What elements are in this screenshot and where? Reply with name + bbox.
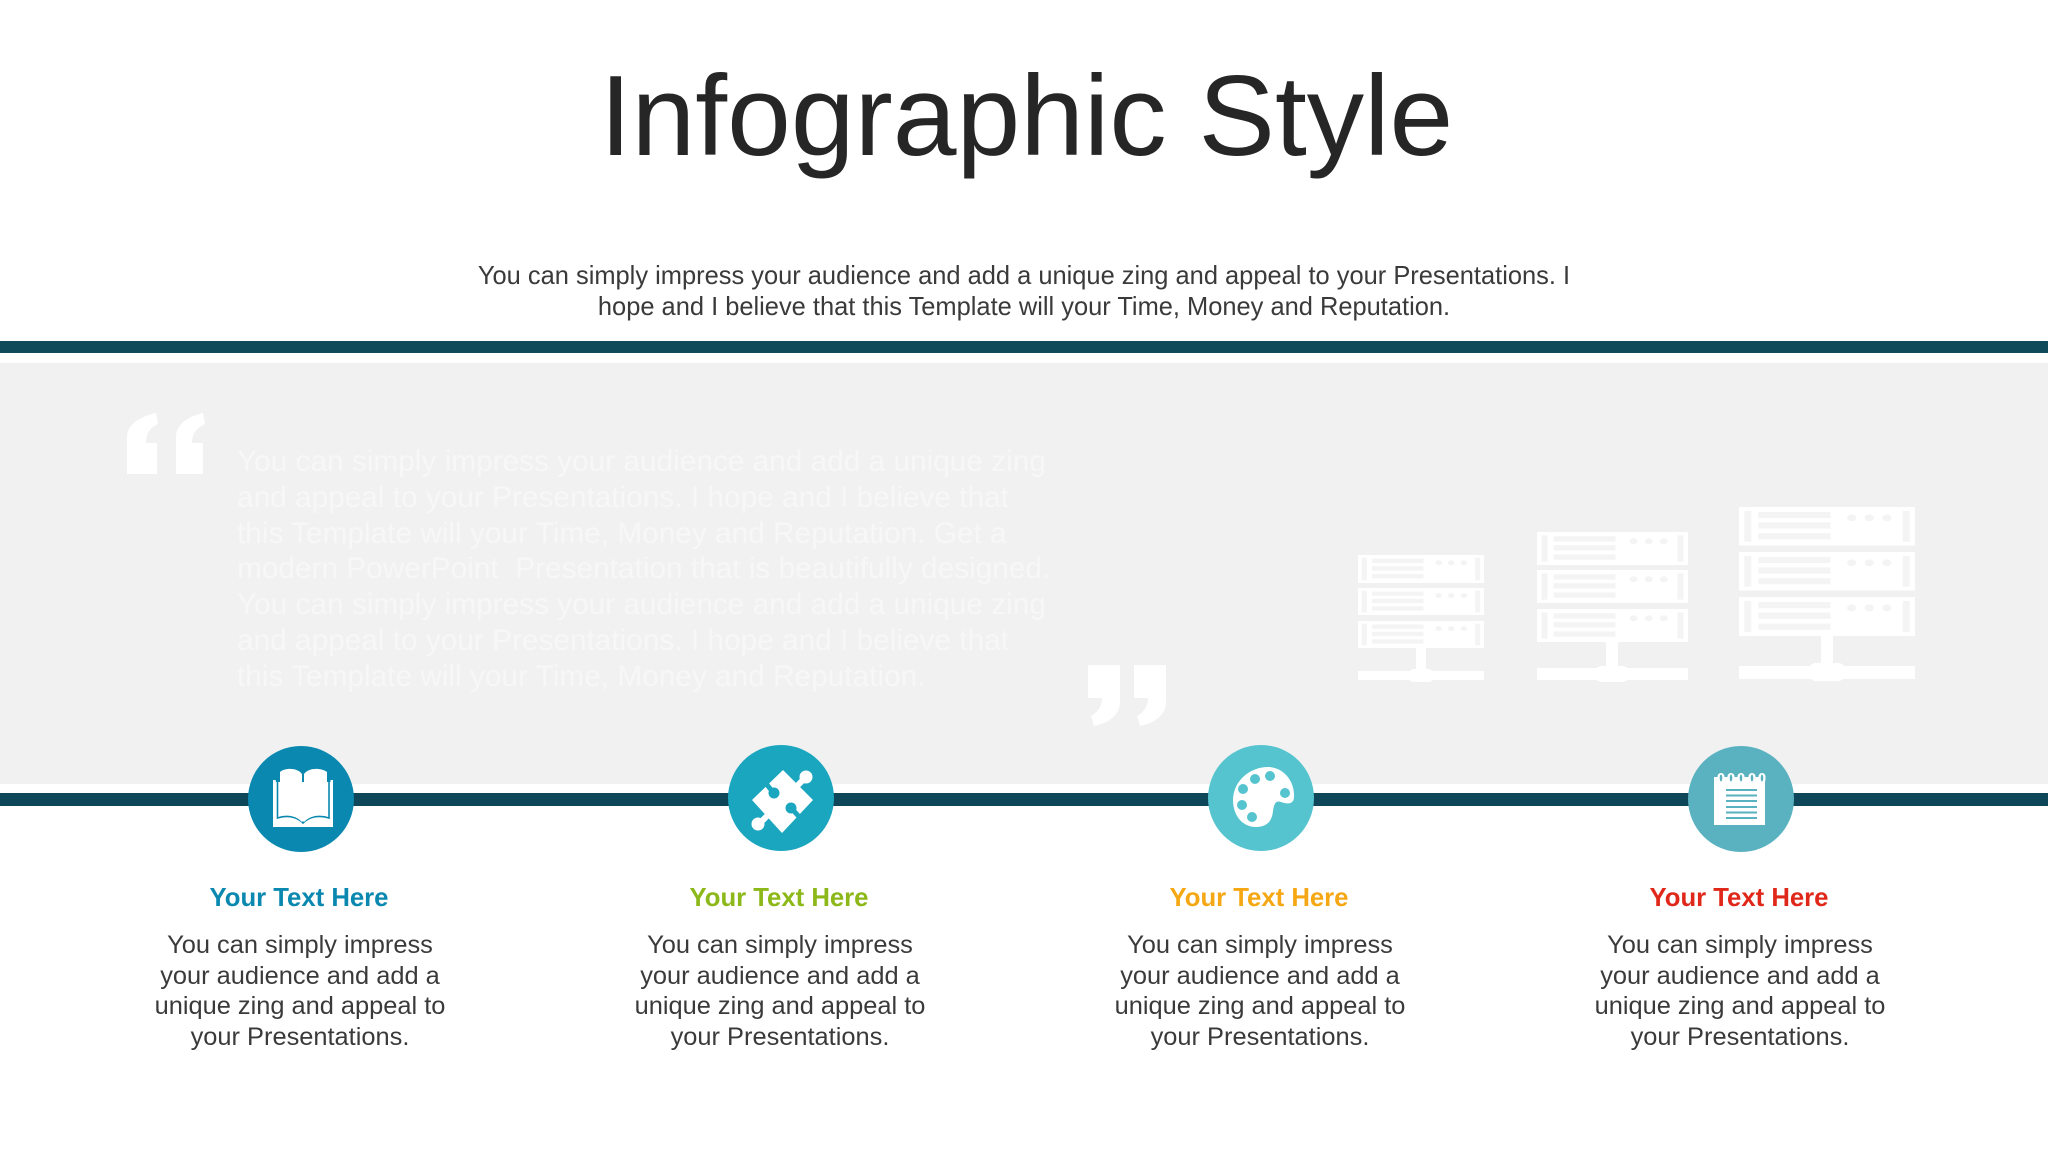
text: column 4: unique zing and appeal to <box>1595 992 1885 1020</box>
subtitle text: hope and I believe that this Template will your Time, Money and Reputation. <box>598 293 1450 321</box>
quote paragraph: and appeal to your Presentations. I hope and I believe that <box>237 624 1009 657</box>
text: column 1: unique zing and appeal to <box>155 992 445 1020</box>
text: column 4: You can simply impress <box>1607 931 1873 959</box>
icon: puzzle piece badge <box>728 745 834 851</box>
quote paragraph: this Template will your Time, Money and Reputation. Get a <box>237 517 1007 550</box>
text: column 1: your Presentations. <box>191 1023 409 1051</box>
text: column 3: unique zing and appeal to <box>1115 992 1405 1020</box>
icon: palette badge <box>1208 745 1314 851</box>
text: column 3: your Presentations. <box>1151 1023 1369 1051</box>
quote paragraph: modern PowerPoint Presentation that is beautifully designed. <box>237 552 1050 585</box>
text: column 2: your Presentations. <box>671 1023 889 1051</box>
text: column 1: your audience and add a <box>160 962 440 990</box>
quote paragraph: You can simply impress your audience and add a unique zing <box>237 445 1046 478</box>
quote paragraph: and appeal to your Presentations. I hope and I believe that <box>237 481 1009 514</box>
heading: column 4: Your Text Here <box>1650 884 1828 912</box>
icon: medium server rack <box>1537 532 1688 682</box>
heading: column 3: Your Text Here <box>1170 884 1348 912</box>
text: column 1 <box>155 931 445 1051</box>
text: column 2: unique zing and appeal to <box>635 992 925 1020</box>
text: column 4: your audience and add a <box>1600 962 1880 990</box>
text: column 3 <box>1115 931 1405 1051</box>
timeline bar <box>0 793 2048 806</box>
text: column 1: You can simply impress <box>167 931 433 959</box>
text: column 4: your Presentations. <box>1631 1023 1849 1051</box>
quote paragraph <box>237 444 1050 695</box>
text: column 4 <box>1595 931 1885 1051</box>
icon: book badge <box>248 746 354 852</box>
icon: small server rack <box>1358 555 1484 682</box>
quote paragraph: You can simply impress your audience and add a unique zing <box>237 588 1046 621</box>
quote paragraph: this Template will your Time, Money and Reputation. <box>237 660 925 693</box>
subtitle text <box>478 262 1570 321</box>
heading: column 2: Your Text Here <box>690 884 868 912</box>
text: column 2 <box>635 931 925 1051</box>
icon: large server rack <box>1739 507 1915 681</box>
top divider bar <box>0 341 2048 353</box>
text: column 2: your audience and add a <box>640 962 920 990</box>
icon: notepad badge <box>1688 746 1794 852</box>
text: column 2: You can simply impress <box>647 931 913 959</box>
heading: column 1: Your Text Here <box>210 884 388 912</box>
icon: closing quote mark <box>1088 665 1166 726</box>
text: column 3: You can simply impress <box>1127 931 1393 959</box>
gray backdrop panel <box>0 363 2048 784</box>
text: column 3: your audience and add a <box>1120 962 1400 990</box>
icon: opening quote mark <box>127 413 205 474</box>
title: Infographic Style <box>600 52 1453 180</box>
subtitle text: You can simply impress your audience and add a unique zing and appeal to your Presentations. I <box>478 262 1570 290</box>
